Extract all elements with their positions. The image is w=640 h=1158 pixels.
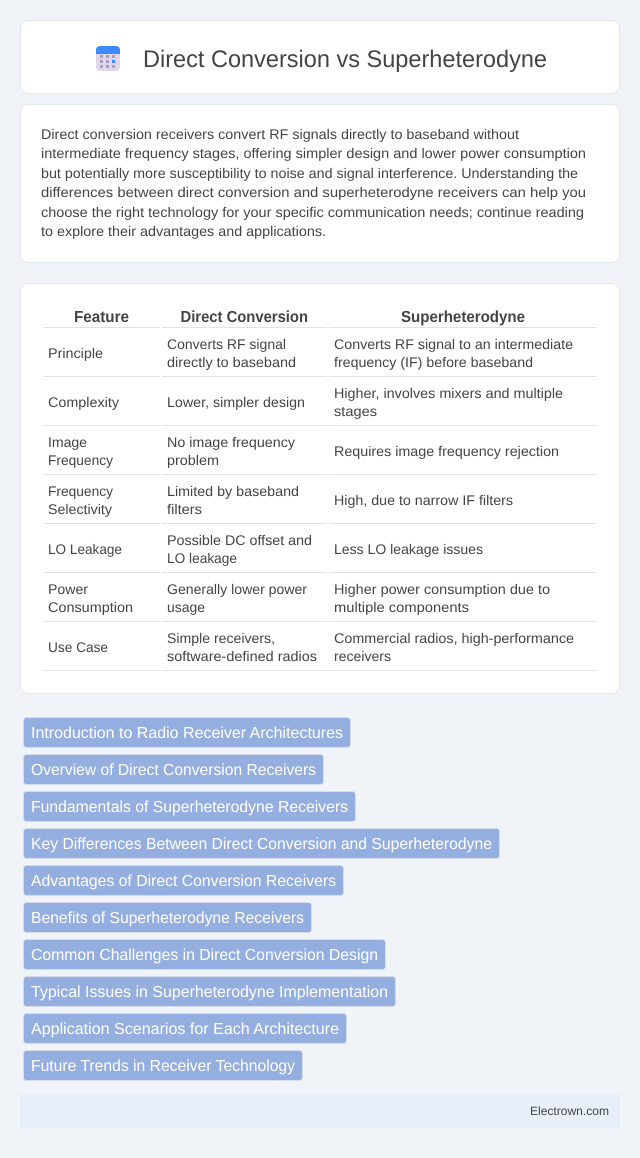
section links	[24, 718, 500, 1080]
link: Typical Issues	[24, 976, 396, 1006]
row: LO Leakage: LO Leakage	[48, 541, 122, 557]
row: Image Frequency: Frequency	[48, 452, 113, 468]
link: Overview: Overview of Direct Conversion Receivers	[31, 762, 316, 779]
row: Use Case: Simple receivers,	[167, 630, 275, 646]
table header row	[74, 309, 525, 326]
link: Advantages: Advantages of Direct Conversion Receivers	[31, 873, 336, 890]
row: Frequency Selectivity: filters	[167, 501, 202, 517]
row: Principle: Principle	[48, 345, 103, 361]
row: Image Frequency: Requires image frequency rejection	[334, 443, 559, 459]
row: LO Leakage: Possible DC offset and	[167, 532, 312, 548]
intro paragraph: but potentially more susceptibility to noise and signal interference. Understanding the	[41, 165, 578, 181]
row: Image Frequency: problem	[167, 452, 219, 468]
intro paragraph: intermediate frequency stages, offering simpler design and lower power consumption	[41, 145, 586, 161]
row: Power Consumption: Generally lower power	[167, 581, 307, 597]
intro paragraph	[41, 126, 586, 239]
row: Power Consumption: Higher power consumption due to	[334, 581, 550, 597]
link: Advantages	[24, 866, 344, 896]
row: Principle	[48, 336, 573, 370]
link: Key Differences: Key Differences Between Direct Conversion and Superheterodyne	[31, 836, 492, 853]
row: LO Leakage: Less LO leakage issues	[334, 541, 483, 557]
icon: calendar	[96, 46, 120, 71]
link: Common Challenges: Common Challenges in Direct Conversion Design	[31, 947, 378, 964]
panel: comparison table	[20, 284, 620, 694]
row: Frequency Selectivity	[48, 483, 513, 517]
row: Power Consumption: usage	[167, 599, 205, 615]
row: Complexity: Higher, involves mixers and multiple	[334, 385, 563, 401]
row: Principle: frequency (IF) before baseband	[334, 354, 533, 370]
row: Use Case: software-defined radios	[167, 648, 317, 664]
link: Benefits: Benefits of Superheterodyne Receivers	[31, 910, 304, 927]
row: Frequency Selectivity: Limited by baseband	[167, 483, 299, 499]
row: Frequency Selectivity: Frequency	[48, 483, 113, 499]
row: Principle: Converts RF signal to an intermediate	[334, 336, 573, 352]
title: Direct Conversion vs Superheterodyne	[143, 46, 547, 73]
link: Overview	[24, 754, 324, 784]
footer	[20, 1094, 620, 1128]
intro paragraph: differences between direct conversion and superheterodyne receivers can help you	[41, 184, 586, 200]
row: Complexity: stages	[334, 403, 377, 419]
intro paragraph: Direct conversion receivers convert RF signals directly to baseband without	[41, 126, 519, 142]
intro paragraph: to explore their advantages and applications.	[41, 223, 326, 239]
row: Frequency Selectivity: Selectivity	[48, 501, 112, 517]
panel: introduction	[20, 104, 620, 262]
table header row: Superheterodyne	[401, 309, 525, 326]
row: Complexity	[48, 385, 563, 419]
row: Use Case: Commercial radios, high-performance	[334, 630, 574, 646]
row: LO Leakage: LO leakage	[167, 550, 237, 566]
row: Image Frequency	[48, 434, 559, 468]
row: Complexity: Lower, simpler design	[167, 394, 305, 410]
row: Principle: Converts RF signal	[167, 336, 286, 352]
link: Introduction	[24, 718, 350, 748]
footer: Electrown.com	[530, 1104, 609, 1118]
row: Power Consumption: Power	[48, 581, 88, 597]
row: Use Case: Use Case	[48, 639, 108, 655]
link: Fundamentals	[24, 792, 356, 822]
row: Power Consumption: Consumption	[48, 599, 133, 615]
row: Image Frequency: Image	[48, 434, 87, 450]
header panel	[20, 20, 620, 94]
link: Future Trends	[24, 1050, 302, 1080]
table header row: Feature	[74, 309, 129, 326]
row: Complexity: Complexity	[48, 394, 119, 410]
row: Power Consumption	[48, 581, 550, 615]
link: Benefits	[24, 902, 312, 932]
row: LO Leakage	[48, 532, 483, 566]
row: Frequency Selectivity: High, due to narrow IF filters	[334, 492, 513, 508]
link: Typical Issues: Typical Issues in Superheterodyne Implementation	[31, 984, 388, 1001]
intro paragraph: choose the right technology for your specific communication needs; continue reading	[41, 204, 584, 220]
link: Common Challenges	[24, 940, 386, 970]
row: Use Case: receivers	[334, 648, 391, 664]
link: Application Scenarios	[24, 1014, 346, 1044]
link: Application Scenarios: Application Scenarios for Each Architecture	[31, 1021, 339, 1038]
link: Introduction: Introduction to Radio Receiver Architectures	[31, 725, 343, 742]
row: Power Consumption: multiple components	[334, 599, 469, 615]
row: Image Frequency: No image frequency	[167, 434, 295, 450]
table header row: Direct Conversion	[180, 309, 308, 326]
link: Fundamentals: Fundamentals of Superheterodyne Receivers	[31, 799, 348, 816]
link: Future Trends: Future Trends in Receiver Technology	[31, 1058, 295, 1075]
link: Key Differences	[24, 828, 500, 858]
row: Principle: directly to baseband	[167, 354, 296, 370]
row: Use Case	[48, 630, 574, 664]
